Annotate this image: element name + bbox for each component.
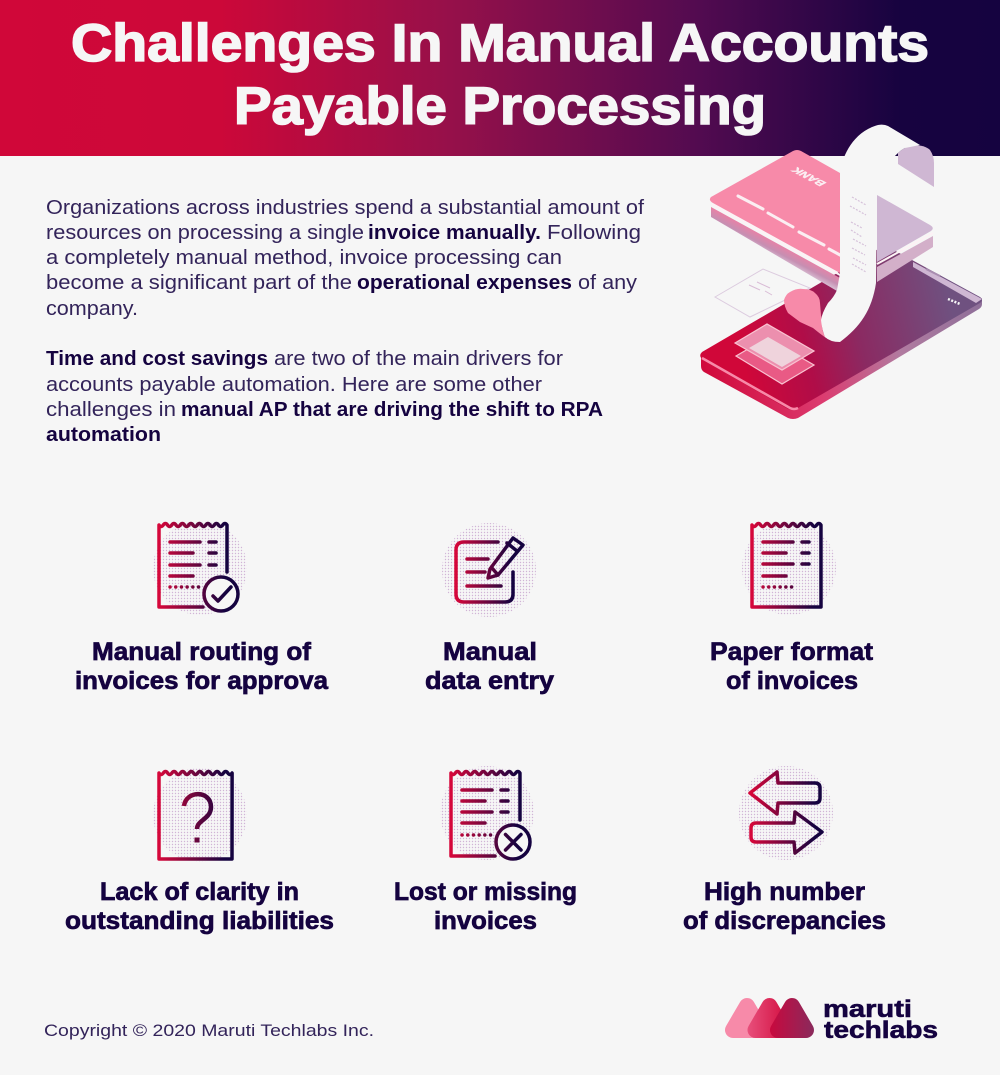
- header banner: [0, 0, 1000, 156]
- card stripe: [738, 196, 840, 255]
- second paragraph: manual AP that are driving the shift to RPA: [181, 399, 603, 421]
- label: High number: [704, 878, 865, 906]
- intro paragraph: invoice manually.: [368, 222, 541, 244]
- paper outline: [715, 269, 810, 317]
- intro paragraph: operational expenses: [357, 272, 572, 294]
- intro paragraph: company.: [46, 298, 138, 320]
- icon: paper with question mark: [153, 768, 247, 862]
- label: [710, 638, 874, 695]
- title: Payable Processing: [234, 77, 766, 136]
- receipt text lines: [850, 197, 866, 272]
- intro paragraph: become a significant part of the: [46, 272, 352, 294]
- label: data entry: [425, 667, 554, 695]
- title: Challenges In Manual Accounts: [71, 14, 929, 73]
- label: Manual routing of: [92, 638, 312, 666]
- label: [683, 878, 886, 935]
- BANK label: BANK: [789, 166, 830, 187]
- bank card: [710, 150, 933, 292]
- label: of discrepancies: [683, 907, 886, 935]
- icon on phone: envelope tile: [735, 324, 814, 384]
- intro paragraph: [46, 197, 644, 320]
- logo: [733, 996, 938, 1044]
- intro paragraph: Following: [547, 222, 641, 244]
- icon: note with pencil: [442, 523, 536, 617]
- lower card layer: [711, 207, 840, 292]
- label: [65, 878, 334, 935]
- second paragraph: Time and cost savings: [46, 348, 268, 370]
- icon: receipt with cross: [440, 766, 534, 860]
- label: of invoices: [726, 667, 858, 695]
- second paragraph: [46, 348, 603, 446]
- icon: receipt with check mark: [153, 521, 247, 615]
- label: Lost or missing: [394, 878, 577, 906]
- intro paragraph: a completely manual method, invoice processing can: [46, 247, 562, 269]
- title: [71, 14, 929, 136]
- second paragraph: are two of the main drivers for: [274, 348, 563, 370]
- second paragraph: challenges in: [46, 399, 176, 421]
- label: [425, 638, 554, 695]
- item: manual routing: [75, 521, 329, 695]
- item: manual data entry: [425, 523, 554, 695]
- label: Paper format: [710, 638, 874, 666]
- label: invoices for approva: [75, 667, 329, 695]
- logo mark: [733, 1006, 806, 1030]
- copyright: Copyright © 2020 Maruti Techlabs Inc.: [44, 1021, 374, 1040]
- label: outstanding liabilities: [65, 907, 334, 935]
- item: discrepancies: [683, 766, 886, 935]
- illustration: invoice, bank card and phone: [700, 125, 982, 419]
- item: paper format: [710, 521, 874, 695]
- intro paragraph: resources on processing a single: [46, 222, 364, 244]
- label: [75, 638, 329, 695]
- label: Manual: [443, 638, 537, 666]
- label: [394, 878, 577, 935]
- logo wordmark: techlabs: [824, 1017, 938, 1044]
- ribbon pink tail: [784, 289, 826, 338]
- icon: opposing arrows: [739, 766, 833, 860]
- label: invoices: [434, 907, 537, 935]
- intro paragraph: Organizations across industries spend a substantial amount of: [46, 197, 644, 219]
- second paragraph: accounts payable automation. Here are some other: [46, 374, 542, 396]
- item: lost or missing: [394, 766, 577, 935]
- icon: paper invoice: [742, 521, 836, 615]
- card top face: [710, 150, 840, 273]
- logo wordmark: maruti: [823, 996, 912, 1023]
- ribbon body: [821, 125, 913, 342]
- ribbon lilac curl: [898, 145, 934, 187]
- label: Lack of clarity in: [100, 878, 299, 906]
- paper receipt ribbon: [784, 125, 934, 342]
- intro paragraph: of any: [578, 272, 637, 294]
- logo wordmark: [823, 996, 938, 1044]
- phone: [700, 246, 982, 419]
- second paragraph: automation: [46, 424, 161, 446]
- item: lack of clarity: [65, 768, 334, 935]
